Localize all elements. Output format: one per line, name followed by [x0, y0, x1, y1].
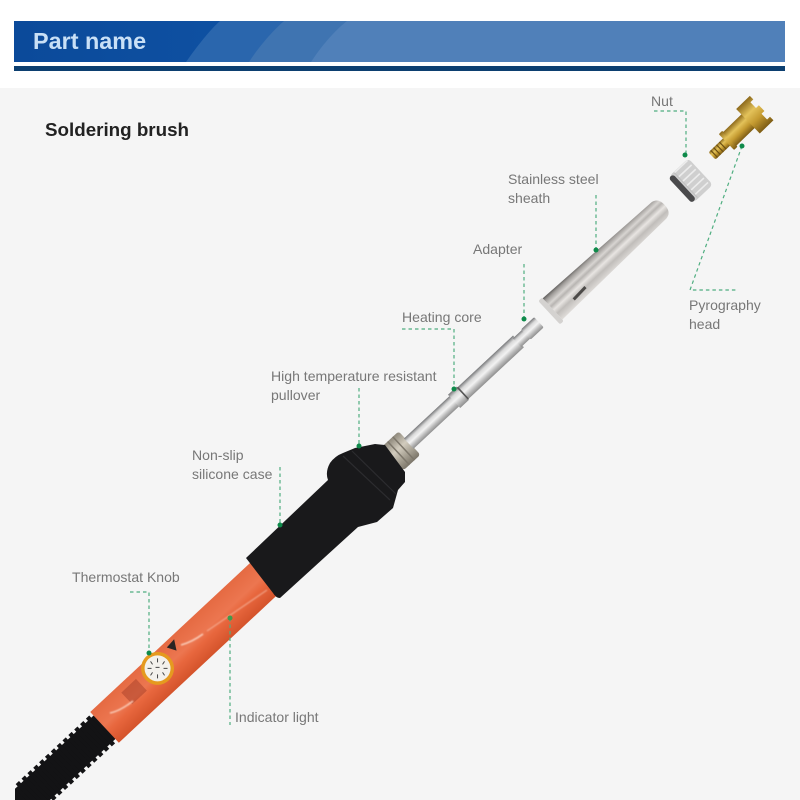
label: stainless steel sheath: Stainless steel — [508, 171, 599, 187]
label: thermostat knob: Thermostat Knob — [72, 569, 180, 585]
label: non-slip silicone case — [192, 447, 282, 528]
label: indicator light: Indicator light — [235, 709, 319, 725]
thermostat knob — [141, 652, 174, 685]
label: nut: Nut — [651, 93, 673, 109]
heating core — [448, 316, 545, 408]
section heading: Soldering brush — [45, 119, 189, 140]
label: stainless steel sheath: sheath — [508, 190, 550, 206]
label: adapter — [473, 241, 526, 322]
soldering iron assembly — [84, 149, 715, 743]
handle highlights — [110, 590, 267, 713]
label: pyrography head — [689, 144, 761, 332]
header banner: Part name — [33, 28, 146, 54]
nut — [668, 158, 713, 204]
label: pyrography head: Pyrography — [689, 297, 761, 313]
indicator arrow — [166, 639, 181, 654]
label: high temperature resistant pullover: pullover — [271, 387, 321, 403]
label: stainless steel sheath — [508, 171, 599, 252]
black silicone grip — [246, 444, 405, 598]
label: nut — [651, 93, 688, 158]
label: adapter: Adapter — [473, 241, 523, 257]
stainless steel sheath — [538, 193, 676, 324]
label: heating core — [402, 309, 482, 392]
label: non-slip silicone case: Non-slip — [192, 447, 244, 463]
label: heating core: Heating core — [402, 309, 482, 325]
header banner — [14, 21, 785, 71]
label: indicator light — [228, 616, 319, 725]
metal ring — [382, 431, 420, 470]
power cable — [20, 724, 108, 800]
label: non-slip silicone case: silicone case — [192, 466, 273, 482]
label: high temperature resistant pullover: High temperature resistant — [271, 368, 437, 384]
pyrography head — [700, 96, 773, 168]
label: high temperature resistant pullover — [271, 368, 437, 448]
metal tube — [404, 394, 462, 449]
label: thermostat knob — [72, 569, 180, 656]
orange handle — [90, 562, 280, 743]
label: pyrography head: head — [689, 316, 720, 332]
